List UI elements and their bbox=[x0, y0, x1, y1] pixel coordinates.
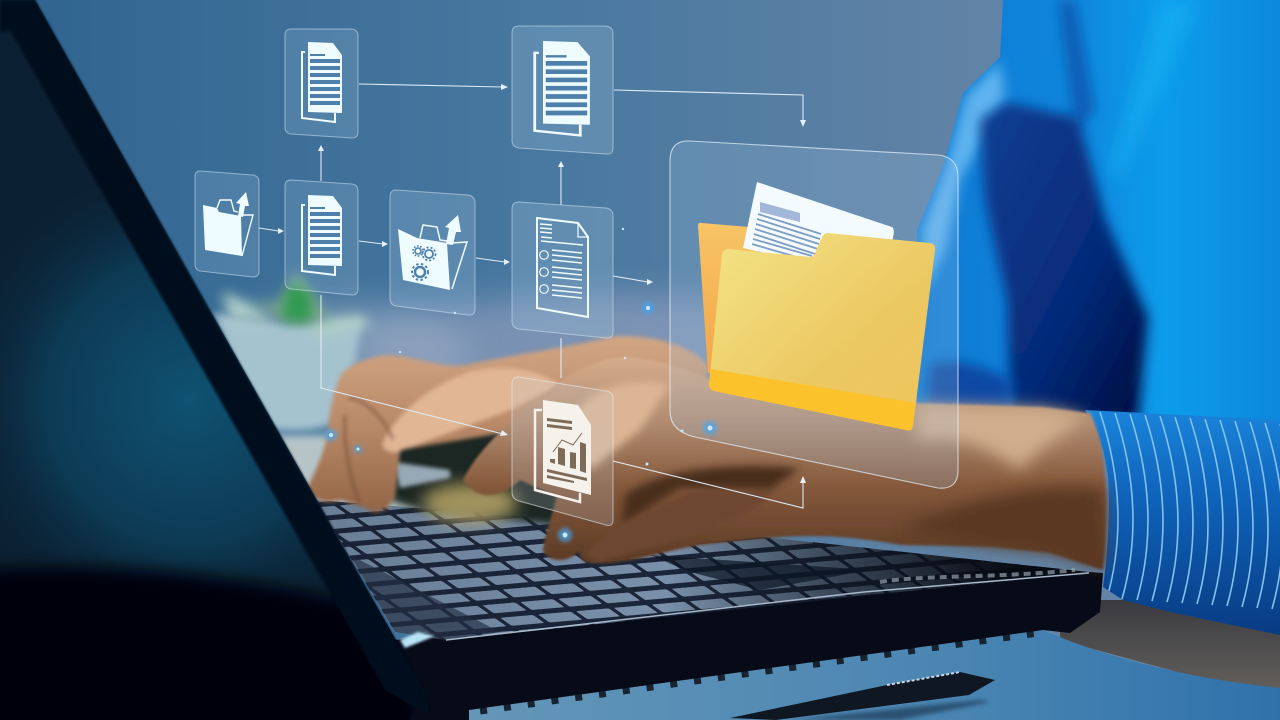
finger gaps bbox=[345, 398, 393, 505]
front edge highlight bbox=[446, 573, 1089, 640]
wrist shadow bbox=[900, 487, 1105, 568]
left hand bbox=[308, 336, 708, 512]
paper lines bbox=[752, 214, 821, 258]
hex-pattern keys right bbox=[880, 570, 1075, 582]
wrist highlight bbox=[917, 405, 1085, 470]
icon: folder with gears and arrow bbox=[398, 215, 467, 290]
shirt bbox=[900, 0, 1280, 430]
laptop keyboard deck and base bbox=[316, 500, 1103, 720]
lower finger bbox=[585, 490, 770, 562]
paper header block bbox=[760, 202, 800, 222]
screen teal glow bbox=[0, 219, 318, 578]
workflow card: top small document bbox=[285, 29, 358, 138]
paper sheet bbox=[743, 182, 894, 280]
desk bbox=[270, 435, 1280, 700]
pot bbox=[213, 313, 362, 431]
leaves bbox=[222, 292, 372, 338]
laptop lid bbox=[0, 0, 430, 720]
finger shadow gap bbox=[622, 466, 800, 525]
shirt crease bbox=[1058, 0, 1095, 130]
corner highlight bbox=[400, 632, 435, 648]
folder back bbox=[698, 223, 760, 380]
icon: large document stack bbox=[535, 41, 590, 135]
workflow card: report chart bbox=[512, 377, 613, 525]
folder front bbox=[709, 233, 935, 430]
right hand and wrist bbox=[463, 357, 1106, 570]
small keys lower left bbox=[350, 555, 500, 640]
icon: report page with bar chart bbox=[535, 400, 591, 502]
pen bbox=[730, 672, 995, 720]
dark area and warm glow under hands bbox=[390, 400, 560, 525]
keyboard area bbox=[316, 500, 1089, 640]
workflow card: top large document bbox=[512, 26, 613, 154]
notebook with spiral binding bbox=[469, 630, 1280, 720]
workflow card: gears folder bbox=[390, 190, 475, 315]
dark key block bbox=[650, 555, 870, 590]
icon: folder with arrow bbox=[203, 192, 253, 256]
glowing sparkle particles bbox=[325, 228, 717, 542]
pale shirt edge highlight bbox=[922, 62, 1005, 290]
plant in pot bbox=[213, 270, 372, 431]
base bbox=[395, 572, 1103, 720]
workflow card: checklist bbox=[512, 202, 613, 338]
workflow card: upload folder bbox=[195, 171, 259, 277]
icon: document stack bbox=[302, 195, 342, 275]
icon: document stack bbox=[302, 42, 342, 122]
icon: checklist page bbox=[537, 218, 588, 317]
workflow connector arrows bbox=[259, 84, 806, 508]
spiral binding bbox=[480, 631, 1045, 710]
folder bottom band bbox=[709, 369, 915, 430]
icon: large yellow folder with document bbox=[698, 182, 935, 430]
dark shirt fold shadow bbox=[980, 102, 1148, 420]
bezel bbox=[0, 0, 430, 716]
workflow card: middle document bbox=[285, 180, 358, 295]
knuckle highlight bbox=[560, 381, 670, 470]
striped shirt cuff bbox=[1080, 405, 1280, 640]
screen lower shadow bbox=[0, 567, 420, 720]
left hand index finger bbox=[383, 368, 560, 452]
large glass panel containing folder bbox=[670, 141, 958, 488]
